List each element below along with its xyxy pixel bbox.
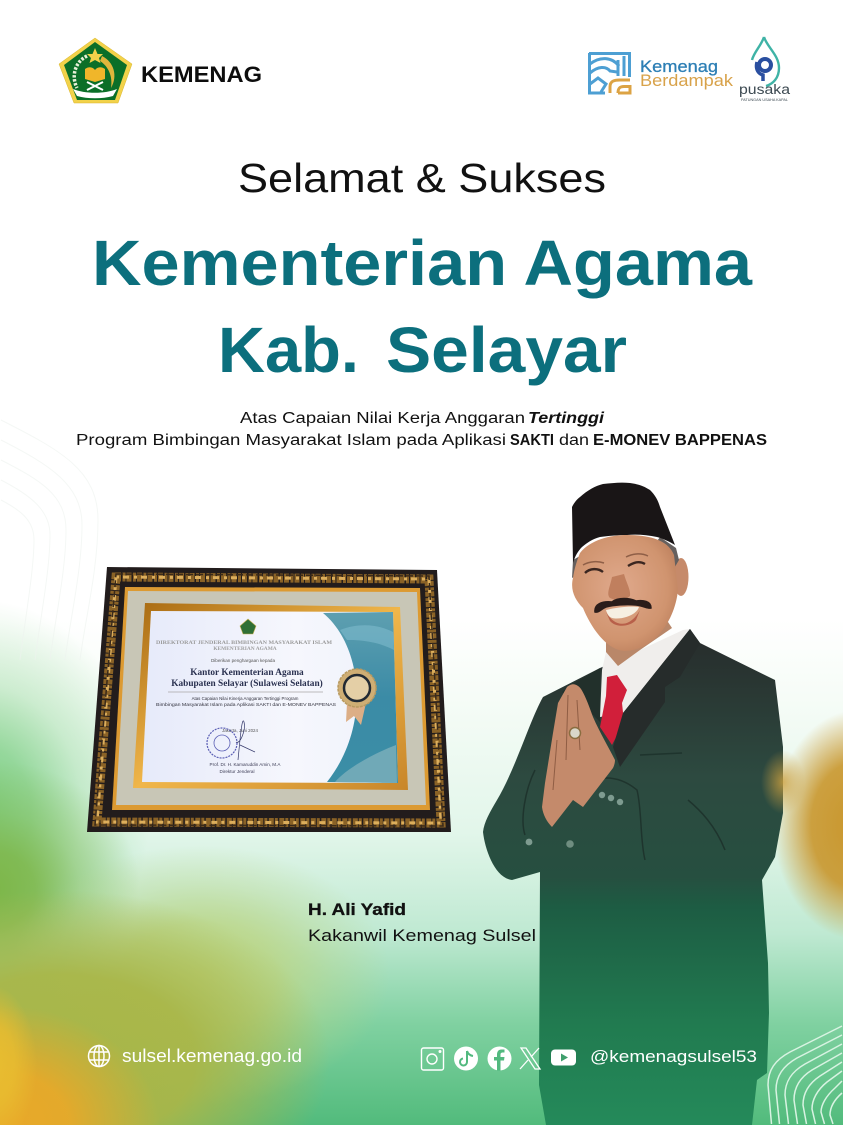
nose	[608, 574, 630, 600]
icon: X	[520, 1048, 540, 1069]
suit	[483, 629, 783, 1125]
logo: Kemenag emblem	[59, 38, 132, 103]
face	[572, 535, 678, 651]
certificate emblem	[240, 619, 256, 634]
lower lip	[606, 610, 640, 626]
shirt	[600, 629, 690, 717]
certificate text: Kantor Kementerian Agama	[190, 668, 304, 678]
description line 2: E-MONEV BAPPENAS	[593, 432, 767, 449]
description line 2: dan	[559, 432, 589, 449]
logo: Pusaka: pusaka	[739, 82, 791, 97]
logo: Kemenag Berdampak: Berdampak	[640, 72, 734, 90]
description line 2	[76, 432, 767, 449]
heading: Kementerian Agama: Kementerian Agama	[92, 227, 752, 299]
website: sulsel.kemenag.go.id	[122, 1046, 302, 1066]
caption: name: H. Ali Yafid	[308, 900, 406, 919]
hat	[572, 483, 675, 563]
certificate paper	[142, 611, 398, 783]
moustache	[595, 598, 651, 612]
certificate text: Prof. Dr. H. Kamaruddin Amin, M.A	[210, 762, 281, 767]
logo: Kemenag Berdampak	[589, 53, 734, 93]
icon: globe	[88, 1046, 110, 1066]
certificate text	[156, 640, 336, 774]
social handle: @kemenagsulsel53	[590, 1047, 757, 1066]
frame: outer dark wood	[87, 567, 451, 832]
description line 2: Program Bimbingan Masyarakat Islam pada Aplikasi	[76, 432, 506, 449]
description line 1	[240, 410, 605, 427]
certificate text: Diberikan penghargaan kepada	[211, 658, 275, 663]
title: Selamat & Sukses: Selamat & Sukses	[238, 155, 606, 201]
description line 1: Tertinggi	[528, 410, 605, 427]
icon: tiktok	[454, 1046, 478, 1070]
ear	[674, 558, 688, 596]
certificate text: Bimbingan Masyarakat Islam pada Aplikasi SAKTI dan E-MONEV BAPPENAS	[156, 702, 336, 707]
frame: linen mat	[116, 591, 426, 805]
certificate text: Kabupaten Selayar (Sulawesi Selatan)	[171, 678, 323, 689]
certificate text: Atas Capaian Nilai Kinerja Anggaran Tertinggi Program	[192, 696, 299, 701]
praying hands	[542, 684, 615, 827]
logo: Pusaka	[739, 37, 791, 102]
frame: gold liner	[112, 587, 430, 810]
finger lines	[553, 695, 580, 790]
framed certificate	[87, 567, 451, 832]
certificate stamp and signature	[207, 721, 255, 760]
suit lapel left	[562, 668, 600, 722]
logo: Kemenag Berdampak: Kemenag	[640, 58, 718, 76]
heading: Kab. Selayar: Selayar	[386, 314, 627, 386]
frame: inner gold liner	[133, 603, 408, 790]
logo text: KEMENAG: KEMENAG	[141, 62, 262, 87]
hair	[572, 537, 679, 578]
icon: instagram	[422, 1048, 444, 1070]
suit folds	[523, 753, 725, 860]
description line 1: Atas Capaian Nilai Kerja Anggaran	[240, 410, 525, 427]
suit lapel right	[613, 629, 700, 767]
smile	[606, 607, 639, 619]
icon: youtube	[551, 1050, 576, 1066]
certificate text: Direktur Jenderal	[220, 769, 254, 774]
neck	[606, 622, 672, 666]
certificate text: DIREKTORAT JENDERAL BIMBINGAN MASYARAKAT ISLAM	[156, 640, 333, 646]
certificate seal	[338, 669, 376, 725]
orange glow over sleeve	[761, 750, 805, 814]
icon: facebook	[488, 1046, 512, 1070]
person: H. Ali Yafid	[483, 483, 805, 1125]
certificate text: Jakarta, Juni 2024	[222, 728, 258, 733]
logo: Pusaka: PATUNGAN USAHA KAPAL	[741, 98, 788, 102]
eyebrows	[583, 554, 648, 565]
ring	[570, 728, 580, 738]
decorative line pattern bottom right	[768, 1026, 842, 1124]
description line 2: SAKTI	[510, 432, 554, 449]
frame: ornamental gold band	[95, 574, 443, 826]
caption: role: Kakanwil Kemenag Sulsel	[308, 926, 536, 945]
certificate teal curve	[323, 612, 398, 783]
sleeve buttons	[526, 792, 623, 848]
eyes	[585, 562, 645, 573]
heading: Kab. Selayar: Kab.	[218, 314, 359, 386]
decorative line pattern left	[1, 420, 98, 660]
tie	[600, 675, 627, 745]
heading: Kab. Selayar	[218, 314, 627, 386]
certificate text: KEMENTERIAN AGAMA	[213, 646, 277, 652]
